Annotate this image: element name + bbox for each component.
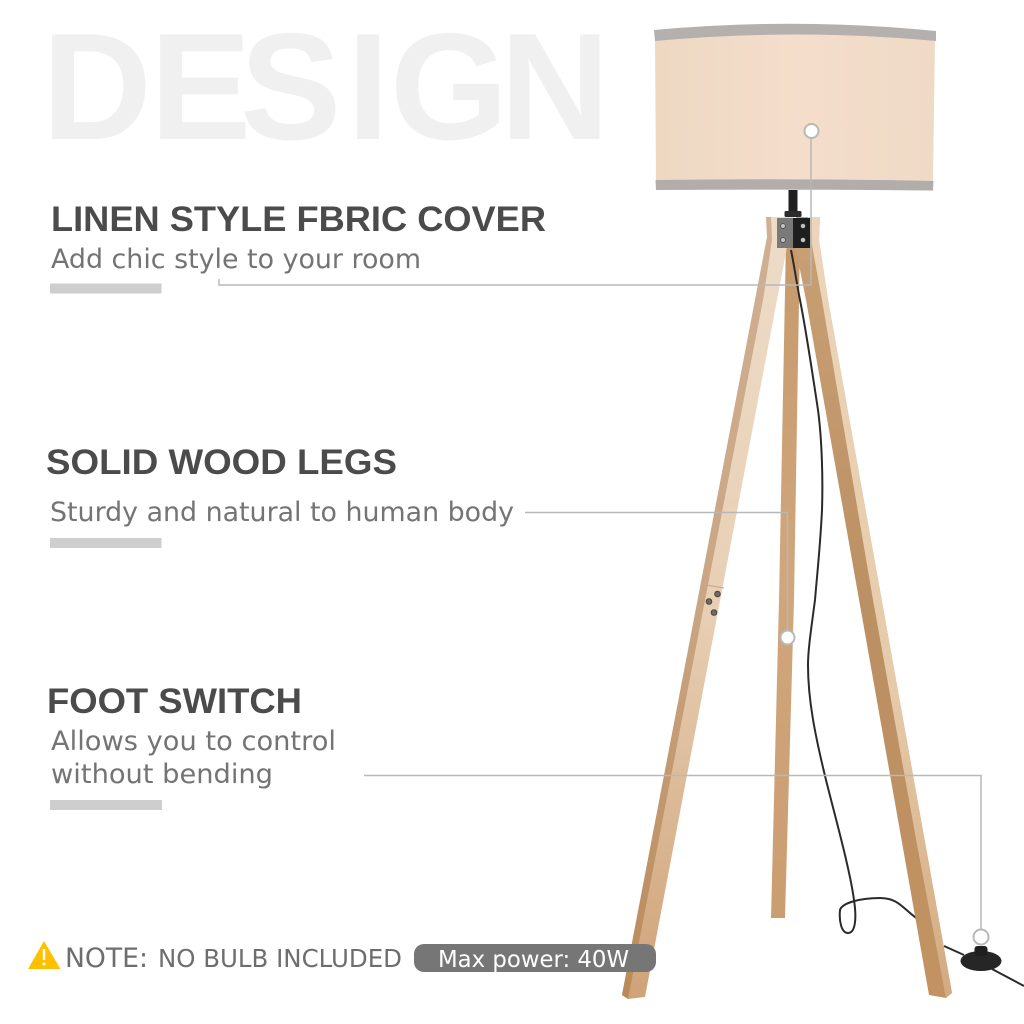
note label: NOTE: — [65, 943, 148, 974]
accent bar: solid wood legs — [50, 538, 162, 548]
badge: max power: Max power: 40W — [438, 947, 629, 973]
subtext: foot switch — [51, 726, 336, 790]
cable to foot switch — [944, 946, 1024, 986]
accent bar: linen style — [50, 284, 162, 294]
leg screws — [706, 591, 720, 615]
accent bar: foot switch — [50, 800, 162, 810]
lamp right leg — [796, 217, 952, 998]
callout: foot switch leader line — [364, 776, 988, 944]
illustration: tripod floor lamp — [622, 24, 1024, 999]
heading: foot switch: FOOT SWITCH — [47, 682, 302, 721]
note row — [28, 941, 402, 974]
icon: warning triangle — [28, 941, 60, 969]
lamp left leg — [622, 217, 794, 999]
metal bracket — [777, 218, 810, 248]
panel: foot switch feature text — [47, 682, 336, 810]
watermark heading: DESIGN: DESIGN — [42, 2, 610, 172]
shade top trim — [654, 24, 936, 41]
subtext: linen style: Add chic style to your room — [51, 244, 421, 275]
callout: linen cover leader line — [219, 124, 818, 285]
panel: solid wood feature text — [46, 443, 514, 548]
lamp centre leg — [771, 240, 800, 918]
subtext: foot switch: Allows you to control — [51, 726, 336, 757]
lamp shade — [654, 24, 936, 191]
heading: linen style: LINEN STYLE FBRIC COVER — [51, 200, 546, 239]
heading: solid wood legs: SOLID WOOD LEGS — [46, 443, 397, 482]
subtext: foot switch: without bending — [51, 759, 273, 790]
callout: wood legs leader line — [525, 512, 794, 644]
note text: NO BULB INCLUDED — [158, 944, 402, 973]
foot switch — [960, 946, 1002, 971]
subtext: solid wood legs: Sturdy and natural to human body — [50, 497, 514, 528]
shade bottom trim — [656, 179, 934, 190]
power cable — [791, 250, 922, 933]
panel: linen fabric feature text — [50, 200, 546, 294]
lamp stem — [784, 190, 802, 217]
